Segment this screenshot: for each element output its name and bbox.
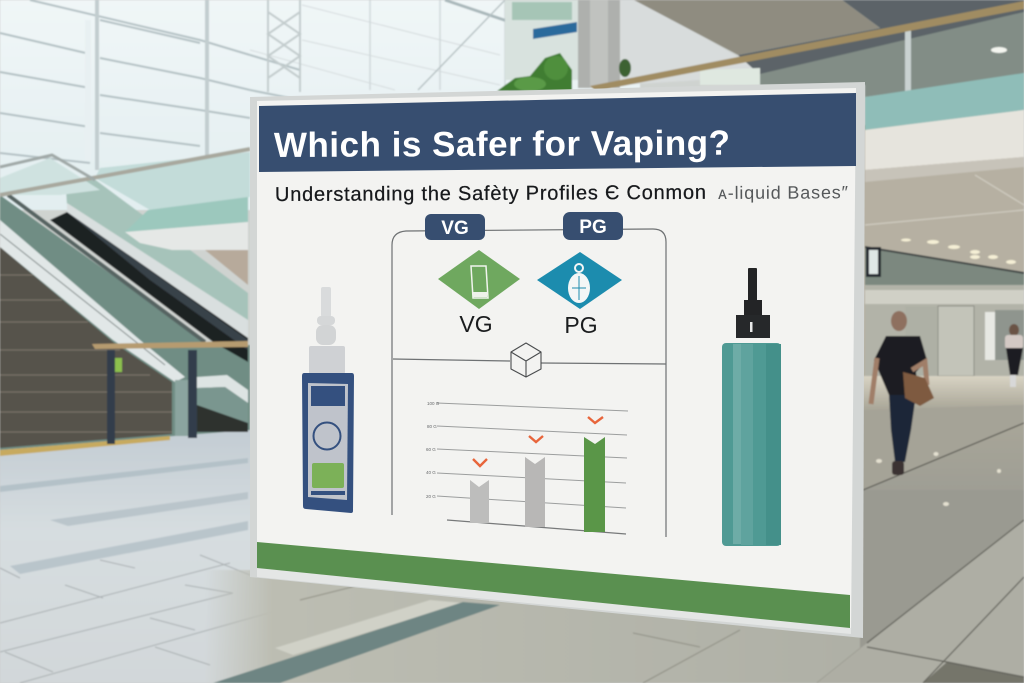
header banner: [259, 93, 856, 172]
column and plant: [497, 0, 631, 91]
escalator: [0, 178, 250, 450]
right floor: [817, 376, 1024, 683]
bar chart: 40 G: [426, 470, 436, 475]
subtitle end: ᴀ-liquid Bases″: [718, 182, 849, 203]
far shops: [865, 247, 1024, 377]
bar chart: [426, 401, 628, 534]
badge: VG: [425, 214, 485, 240]
badge: VG: VG: [441, 218, 469, 239]
bar chart: 20 G: [426, 494, 436, 499]
right bands and soffit: [860, 73, 1024, 385]
bottom stone floor: [205, 570, 880, 683]
person in distance: [1005, 324, 1023, 387]
comparison frame: [392, 229, 666, 537]
railing, balcony at left: [0, 149, 250, 285]
badge: PG: PG: [579, 217, 607, 238]
label: PG: PG: [564, 312, 598, 338]
board bottom strip: [257, 568, 851, 634]
wooden rail: [92, 341, 248, 444]
icon: PG diamond: [537, 252, 622, 309]
illustration: left device bottle: [302, 287, 354, 513]
subtitle: Understanding the Safèty Profiles Є Conmon: [275, 182, 706, 206]
badge: PG: [563, 212, 623, 240]
bar chart: 60 G: [426, 447, 436, 452]
bar chart: 80 G: [427, 424, 437, 429]
icon: VG diamond: [438, 250, 520, 309]
board face: [257, 88, 856, 632]
board frame: [250, 82, 865, 638]
upper right ceiling and balcony: [590, 0, 1024, 97]
icon: cube: [511, 343, 541, 377]
title: Which is Safer for Vaping?: [274, 124, 730, 165]
green footer band: [257, 542, 850, 628]
label: VG: VG: [459, 311, 493, 337]
signboard: [250, 82, 865, 638]
stairs: [0, 247, 172, 456]
person walking: [871, 311, 934, 475]
glass wall: [0, 0, 760, 210]
illustration: right teal bottle: [722, 268, 781, 546]
left floor: [0, 430, 300, 683]
truss: [268, 0, 300, 92]
bar chart: 100 G: [427, 401, 440, 406]
building through glass: [505, 0, 578, 80]
